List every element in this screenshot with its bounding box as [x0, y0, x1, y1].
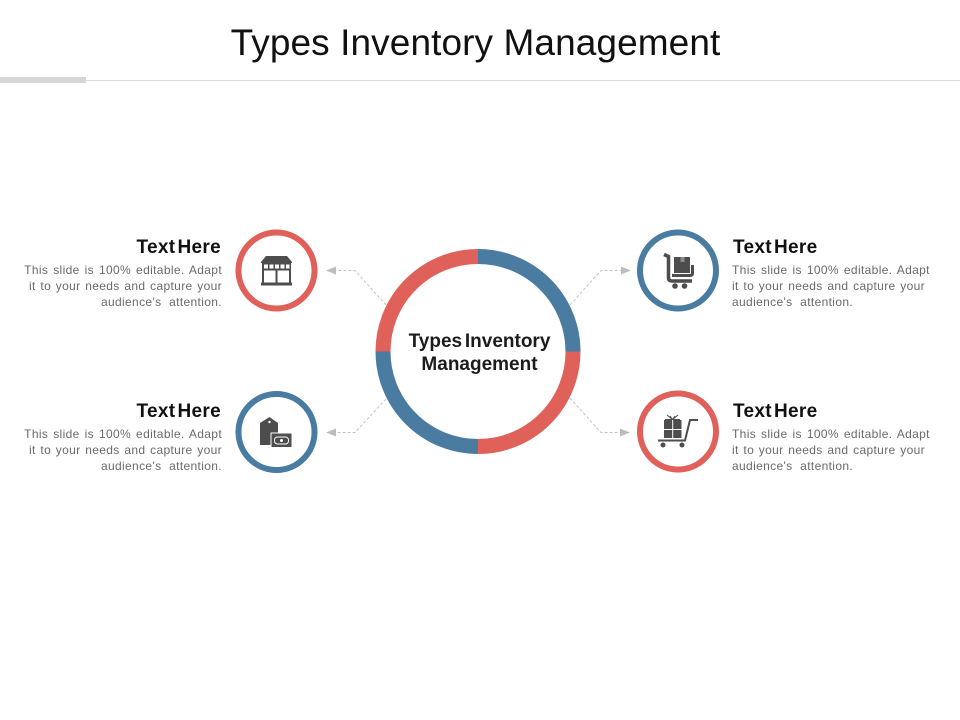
text block: top left: it to your needs and capture your [29, 279, 222, 293]
text block: top left [24, 237, 222, 309]
text block: bottom right: it to your needs and capture your [732, 443, 925, 457]
text block: bottom left: This slide is 100% editable. Adapt [24, 426, 222, 440]
circle icon: store [238, 232, 314, 308]
text block: top right: This slide is 100% editable. Adapt [732, 262, 930, 276]
text block: bottom right: Text Here [733, 401, 818, 422]
text block: top right: audience's attention. [732, 295, 853, 309]
text block: bottom right: This slide is 100% editable. Adapt [732, 426, 930, 440]
text block: top left: This slide is 100% editable. Adapt [24, 262, 222, 276]
circle icon: cart with box [640, 232, 716, 308]
text block: bottom left: Text Here [136, 401, 221, 422]
connector: top left [326, 266, 386, 305]
center label: Types Inventory [409, 331, 550, 352]
text block: top right [732, 237, 930, 309]
title: Types Inventory Management [231, 22, 720, 63]
text block: bottom right [732, 401, 930, 473]
text block: top right: Text Here [733, 237, 818, 258]
central ring [383, 256, 573, 446]
center label [408, 331, 550, 375]
text block: bottom right: audience's attention. [732, 459, 853, 473]
center label: Management [421, 354, 538, 375]
text block: bottom left: audience's attention. [101, 459, 222, 473]
text block: bottom left [24, 401, 222, 473]
connector: bottom right [570, 398, 630, 436]
circle icon: gift on trolley [640, 394, 716, 470]
connector: top right [570, 266, 631, 305]
text block: top left: audience's attention. [101, 295, 222, 309]
text block: top left: Text Here [136, 237, 221, 258]
text block: bottom left: it to your needs and capture your [29, 443, 222, 457]
circle icon: price tag and banknote [238, 394, 314, 470]
text block: top right: it to your needs and capture your [732, 279, 925, 293]
connector: bottom left [326, 399, 386, 436]
